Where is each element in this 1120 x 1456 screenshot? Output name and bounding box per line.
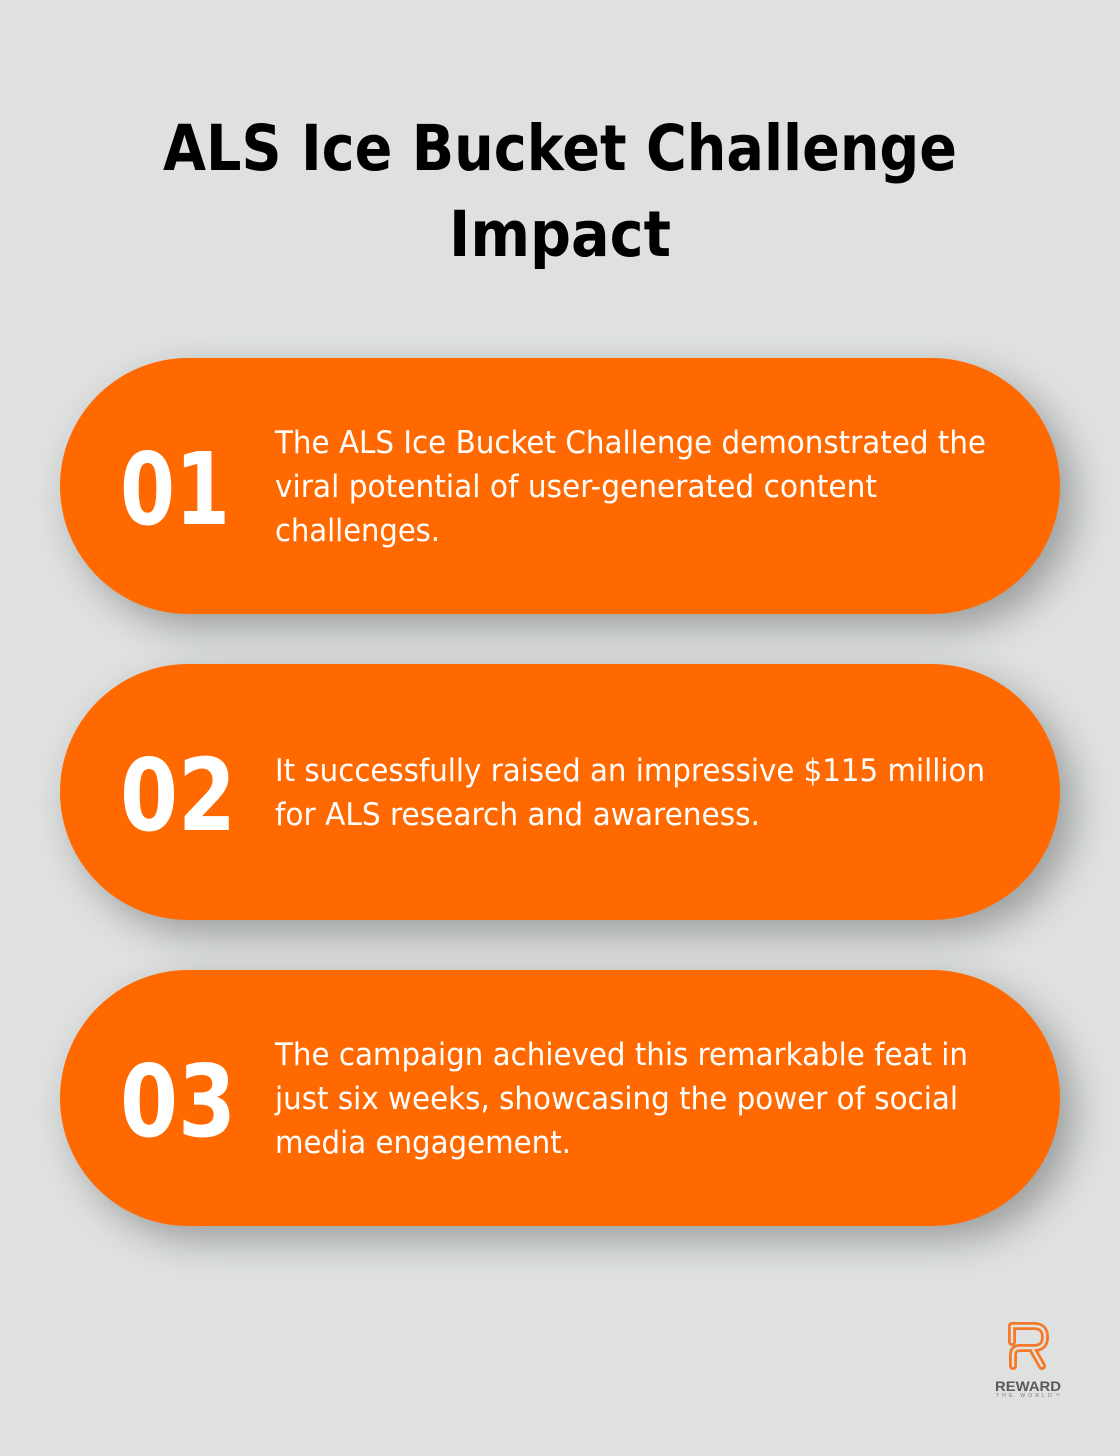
icon: R mark: [1012, 1326, 1045, 1366]
text block: card 01: The ALS Ice Bucket Challenge demonstrated the: [274, 425, 986, 461]
panel: card 01 background: [60, 358, 1060, 614]
panel: card 02 background: [60, 664, 1060, 920]
text block: card 01: challenges.: [275, 513, 440, 549]
title: [163, 112, 957, 271]
text block: card 03: media engagement.: [275, 1125, 571, 1161]
text block: card 02: It successfully raised an impressive $115 million: [275, 753, 985, 789]
logo wordmark: REWARD: [995, 1378, 1061, 1394]
panel: card 03 background: [60, 970, 1060, 1226]
logo tagline: THE WORLD™: [996, 1393, 1060, 1399]
number 03: 03: [120, 1043, 236, 1160]
text block: card 01: [274, 425, 986, 549]
title: Impact: [449, 198, 671, 271]
logo: Reward the World: [995, 1326, 1061, 1399]
text block: card 01: viral potential of user-generated content: [275, 469, 877, 505]
text block: card 03: The campaign achieved this remarkable feat in: [274, 1037, 968, 1073]
number 02: 02: [120, 737, 236, 854]
text block: card 03: [274, 1037, 968, 1161]
text block: card 03: just six weeks, showcasing the power of social: [274, 1081, 958, 1117]
number 01: 01: [120, 431, 230, 548]
title: ALS Ice Bucket Challenge: [163, 112, 957, 185]
text block: card 02: for ALS research and awareness.: [275, 797, 760, 833]
text block: card 02: [275, 753, 985, 833]
